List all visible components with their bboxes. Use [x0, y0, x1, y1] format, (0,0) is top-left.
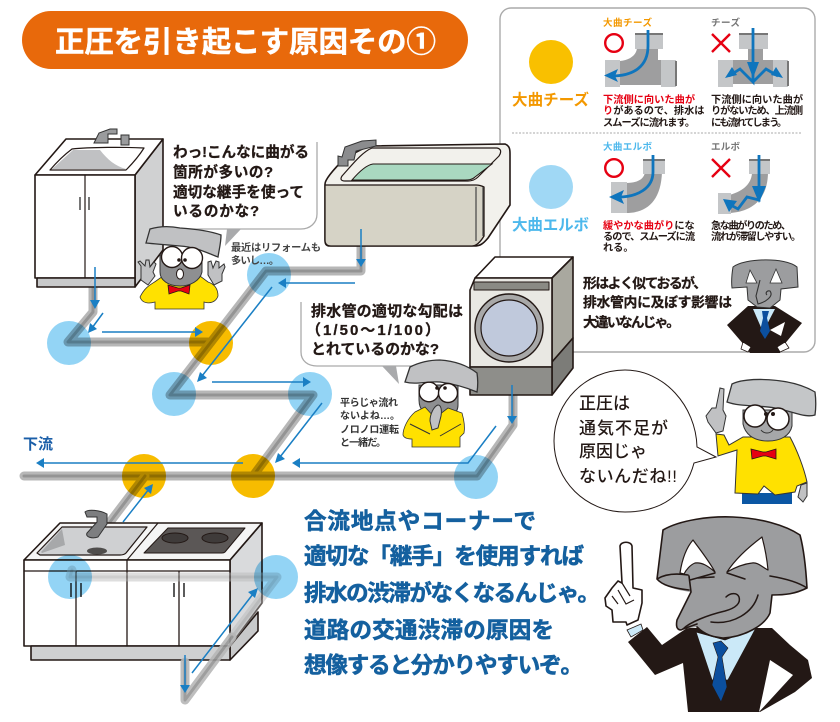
text: flat pipe aside: と一緒だ。 — [340, 436, 386, 449]
text: flat pipe aside — [340, 396, 400, 449]
character: pointing pipe boy — [706, 379, 816, 504]
main message: 合流地点やコーナーで — [304, 509, 536, 534]
label: long-turn elbow: 大曲エルボ — [512, 216, 589, 234]
label: bad elbow heading: エルボ — [711, 141, 740, 153]
pipe: kitchen hidden run — [70, 570, 277, 637]
speech bubble: not ventilation: 原因じゃ — [579, 442, 647, 461]
icon: cross bad mark — [712, 159, 730, 177]
text: flat pipe aside: 平らじゃ流れ — [340, 396, 398, 409]
face lines — [683, 573, 758, 629]
pointing hand — [605, 542, 642, 625]
fitting marker circles — [47, 253, 498, 599]
pipes — [24, 244, 513, 522]
speech bubble: not ventilation: 通気不足が — [579, 418, 668, 438]
flow arrows — [36, 229, 517, 693]
washing machine — [470, 257, 573, 395]
text: good tee explanation: りがあるので、排水は — [603, 104, 704, 117]
pipe: kitchen lower run — [185, 637, 232, 700]
text: reform aside — [231, 241, 321, 267]
character: small elephant in suit — [727, 260, 802, 353]
main message: 道路の交通渋滞の原因を — [304, 618, 554, 643]
speech bubble: fittings question: 箇所が多いの? — [173, 163, 273, 181]
suit — [628, 627, 812, 712]
speech bubble: not ventilation: ないんだね!! — [579, 467, 677, 486]
text: bad tee explanation — [711, 93, 803, 129]
diagram: plain tee — [718, 28, 789, 87]
diagram: long-turn tee — [604, 30, 677, 87]
text: elder comment: 形はよく似ておるが、 — [583, 275, 707, 291]
text: good tee explanation: スムーズに流れます。 — [603, 116, 695, 129]
text: flat pipe aside: ノロノロ運転 — [340, 423, 399, 436]
text: elder comment: 大違いなんじゃ。 — [583, 314, 680, 330]
title banner: 正圧を引き起こす原因その① — [55, 26, 436, 59]
diagram: long-turn elbow — [609, 155, 665, 213]
main message: 適切な「継手」を使用すれば — [304, 544, 584, 569]
text: good elbow explanation: 緩やかな曲がりにな — [603, 219, 695, 232]
eye left — [680, 540, 715, 574]
text: flat pipe aside: ないよね…。 — [340, 410, 400, 422]
text: good elbow explanation — [603, 219, 695, 254]
label: good tee heading: 大曲チーズ — [603, 17, 652, 29]
head fill — [657, 517, 807, 638]
speech bubble: not ventilation: 正圧は — [579, 394, 630, 413]
text: good elbow explanation: れる。 — [603, 242, 634, 254]
character: thinking pipe boy — [403, 360, 478, 447]
icon: cross bad mark — [712, 34, 730, 52]
speech bubble: not ventilation — [554, 370, 716, 512]
shirt — [696, 628, 756, 680]
text: bad elbow explanation: 流れが滞留しやすい。 — [711, 230, 801, 243]
pipe: kitchen upper branch — [110, 476, 145, 522]
pipe: vanity branch — [68, 283, 211, 342]
icon: circle good mark — [605, 34, 623, 52]
speech bubble: slope question: とれているのかな? — [311, 341, 439, 358]
panel: fitting comparison — [500, 8, 815, 353]
text: elder comment: 排水管内に及ぼす影響は — [583, 294, 732, 310]
pipe: bath branch — [170, 244, 361, 476]
text: bad elbow explanation: 急な曲がりのため、 — [711, 219, 791, 232]
vanity unit — [35, 129, 163, 287]
diagram: sharp elbow — [718, 155, 770, 214]
label: long-turn tee: 大曲チーズ — [512, 90, 589, 109]
speech bubble: slope question: 排水管の適切な勾配は — [311, 302, 463, 320]
icon: long-turn elbow circle — [529, 165, 573, 209]
text: good tee explanation: 下流側に向いた曲が — [603, 93, 695, 106]
text: bad tee explanation: にも流れてしまう。 — [711, 116, 787, 129]
main message — [304, 509, 600, 678]
pipes seen through kitchen — [70, 570, 277, 700]
text: elder comment — [583, 275, 732, 330]
label: downstream: 下流 — [23, 436, 53, 453]
speech bubble: fittings question: いるのかな? — [173, 203, 259, 220]
text: reform aside: 多いし…。 — [231, 254, 279, 267]
head outline — [657, 517, 807, 638]
eye right — [727, 537, 768, 572]
text: reform aside: 最近はリフォームも — [231, 241, 321, 254]
text: bad elbow explanation — [711, 219, 801, 243]
kitchen unit — [24, 510, 262, 660]
text: bad tee explanation: りがないため、上流側 — [711, 104, 803, 117]
speech bubble: fittings question: わっ!こんなに曲がる — [173, 143, 309, 161]
pipe: main drain — [24, 390, 513, 476]
character: big elephant in suit — [605, 517, 812, 712]
text: good elbow explanation: るので、スムーズに流 — [603, 230, 695, 243]
title banner — [22, 11, 468, 69]
text: bad tee explanation: 下流側に向いた曲が — [711, 93, 803, 106]
icon: circle good mark — [605, 159, 623, 177]
speech bubble: fittings question: 適切な継手を使って — [173, 183, 304, 201]
speech bubble: fittings question — [163, 142, 317, 246]
main message: 排水の渋滞がなくなるんじゃ。 — [304, 580, 600, 606]
main message: 想像すると分かりやすいぞ。 — [304, 653, 583, 678]
character: surprised pipe boy — [138, 227, 225, 309]
text: good tee explanation — [603, 93, 704, 129]
cuff — [627, 624, 643, 637]
speech bubble: slope question: （1/50～1/100） — [306, 322, 440, 339]
label: good elbow heading: 大曲エルボ — [603, 141, 652, 153]
bathtub — [325, 140, 510, 246]
speech bubble: slope question — [301, 302, 463, 384]
icon: long-turn tee circle — [529, 40, 573, 84]
label: bad tee heading: チーズ — [711, 17, 740, 29]
necktie — [712, 641, 728, 702]
